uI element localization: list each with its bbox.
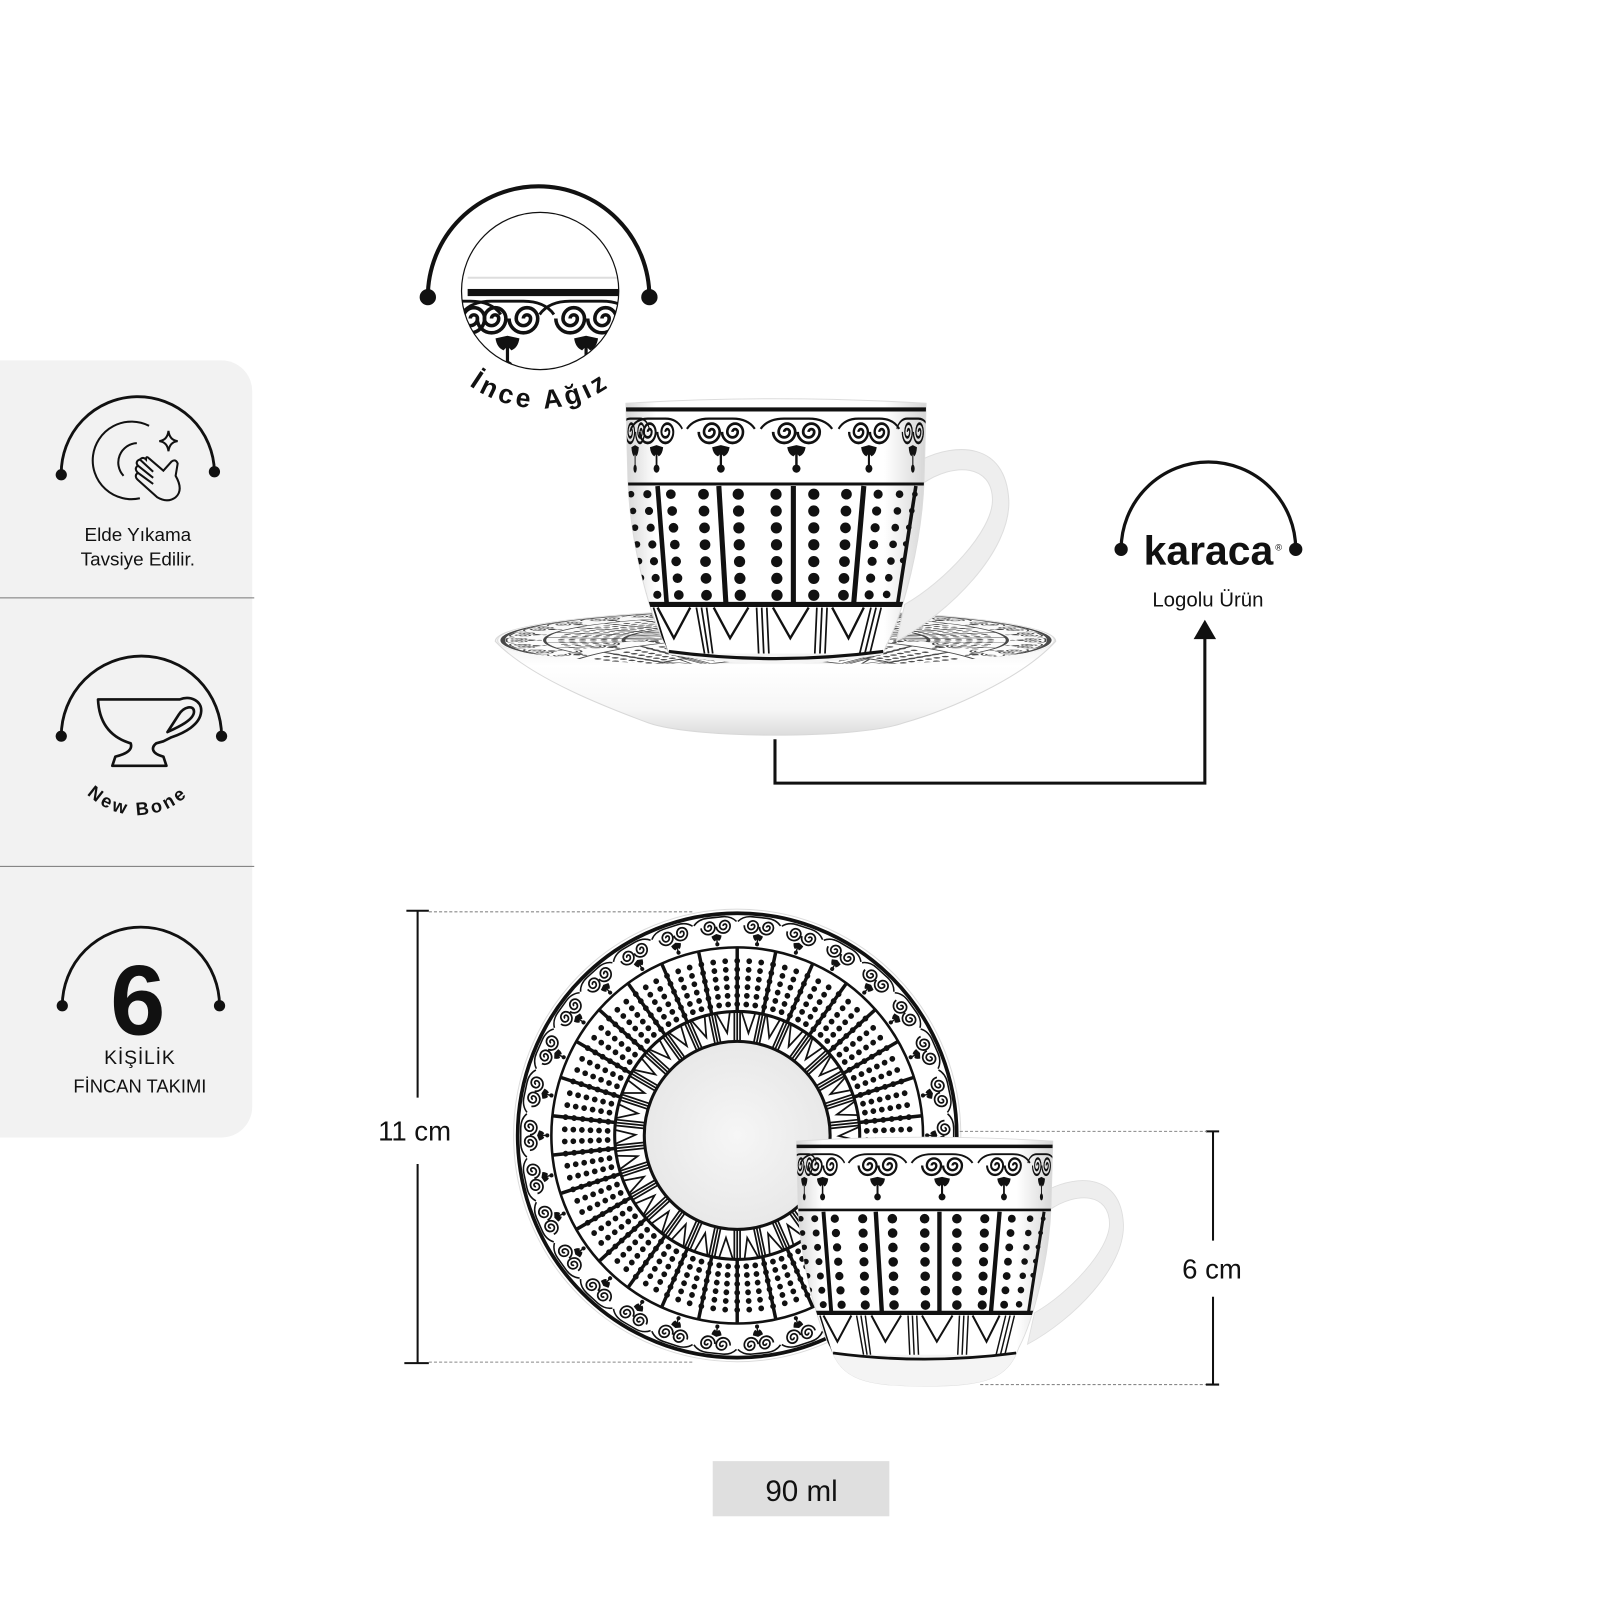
arc with dots [56,656,227,742]
arc with dots [57,927,225,1011]
label: new bone: New Bone [88,785,185,816]
dimension: saucer 11 cm [378,911,694,1363]
product: cup on saucer side view [494,398,1056,736]
label: thin rim: İnce Ağız [470,367,608,410]
label: logo product: Logolu Ürün [1152,590,1264,612]
panel: care features sidebar [0,360,254,1138]
label: persons: KİŞİLİK [104,1046,176,1069]
capacity badge [713,1461,889,1516]
arc with dots [1114,462,1302,556]
badge background [713,1461,889,1516]
arc with dots [56,397,220,480]
product: saucer top view [453,858,1021,1413]
label: hand wash: Elde Yıkama [85,525,192,546]
zoom circle [460,212,620,370]
number six: 6 [110,944,165,1055]
label: cup set: FİNCAN TAKIMI [73,1076,206,1097]
arc with dots [420,186,658,305]
label: 90 ml: 90 ml [765,1475,838,1508]
detail: thin rim zoom [420,184,658,410]
registered mark: ® [1275,542,1282,552]
saucer side [494,612,1056,736]
label: 11 cm: 11 cm [378,1116,451,1147]
feature: new bone [56,654,228,816]
logo callout [1114,462,1302,612]
icon: washing hand [93,422,180,500]
dimension: cup 6 cm [960,1131,1242,1385]
label: hand wash: Tavsiye Edilir. [81,550,195,571]
arrow: logo connector [775,620,1216,783]
feature: six person [57,927,225,1097]
feature: hand wash [56,397,220,571]
cup side [626,398,1010,662]
logo: karaca: karaca [1144,528,1274,574]
label: 6 cm: 6 cm [1182,1253,1242,1284]
panel background [0,360,252,1137]
measure lines [404,911,694,1363]
measure lines [960,1131,1219,1385]
icon: cup [98,698,201,766]
product: cup front view [792,1137,1123,1390]
